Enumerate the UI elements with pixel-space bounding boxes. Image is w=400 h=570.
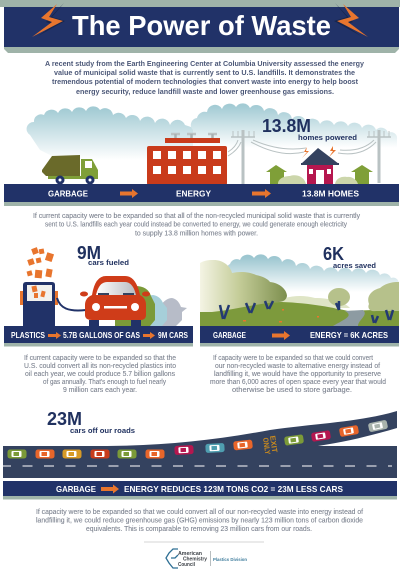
stat: 23M cars off our roads [47, 409, 135, 435]
intro text: value of municipal solid waste that is currently sent to U.S. landfills. It demonstrates the [54, 68, 355, 77]
divider [144, 542, 264, 543]
road with exit ramp [3, 411, 397, 478]
text: open space explanation: landfilling it, we would have the opportunity to preserve [214, 371, 381, 378]
intro text: energy security, reduce landfill waste and lower greenhouse gas emissions. [76, 87, 334, 96]
title text: The Power of Waste [72, 10, 331, 41]
logo: American Chemistry Council: Council [178, 562, 196, 568]
text: open space explanation: If capacity were to be expanded so that we could convert [213, 355, 373, 362]
exit only road marking: ONLY [261, 437, 272, 455]
label bar: garbage energy homes [4, 184, 399, 206]
panel: plastics to cars [4, 243, 193, 346]
road [333, 310, 365, 326]
text: homes explanation: to supply 13.8 million homes with power. [135, 230, 258, 238]
panel: open space saved [200, 244, 399, 346]
power poles and wires [228, 130, 391, 184]
logo: American Chemistry Council: American [178, 551, 202, 557]
label bar: garbage co2 cars: GARBAGE [56, 484, 96, 494]
text: plastics explanation: of gas annually. That's enough to fuel nearly [43, 379, 166, 386]
text: open space explanation: otherwise be used to store garbage. [232, 387, 352, 394]
stat: 6K acres saved: 6K [323, 244, 344, 264]
text: plastics explanation: If current capacity were to be expanded so that the [24, 355, 176, 362]
label bar: plastics gallons cars: 9M CARS [158, 330, 188, 340]
clouds [27, 103, 397, 160]
icon: powered house [301, 146, 339, 185]
title banner [0, 0, 400, 53]
stat: 13.8M homes powered [262, 116, 357, 142]
cars on the road [8, 420, 388, 458]
icon: fuel pump [20, 282, 86, 326]
text: cars explanation: landfilling it, we could reduce greenhouse gas (GHG) emissions by nearly 123 million tons of carbon dioxide [36, 518, 363, 524]
icon: power plant building [147, 134, 227, 185]
exit only road marking [261, 435, 279, 455]
label bar: plastics gallons cars: 5.7B GALLONS OF GAS [63, 330, 140, 340]
text: homes explanation: If current capacity were to be expanded so that all of the non-recycled municipal solid waste that is currently [33, 213, 360, 220]
label bar: garbage energy homes: ENERGY [176, 188, 211, 198]
stat: 6K acres saved: acres saved [333, 261, 376, 270]
stat: 13.8M homes powered: 13.8M [262, 116, 311, 136]
icon: row of pale trees [200, 260, 287, 319]
flowers [243, 309, 319, 322]
label bar: garbage energy homes: GARBAGE [48, 188, 88, 198]
text: homes explanation: sent to U.S. landfills each year could instead be converted to energy, we could generate enough electricity [45, 222, 347, 228]
ground [200, 302, 399, 326]
intro text: tremendous potential of modern technologies that convert waste into energy to help boost [52, 77, 359, 86]
intro text: A recent study from the Earth Engineering Center at Columbia University assessed the energy [45, 59, 364, 68]
exit only road marking: EXIT [268, 435, 279, 454]
label bar: plastics gallons cars: PLASTICS [11, 330, 45, 340]
text: plastics explanation: oil each year, we could produce 5.7 billion gallons [25, 371, 175, 378]
label bar: garbage energy acres: ENERGY = 6K ACRES [310, 330, 388, 340]
text: open space explanation [210, 355, 386, 394]
text: plastics explanation: U.S. could convert all its non-recycled plastics into [24, 363, 176, 370]
text: cars explanation: If capacity were to be expanded so that we could convert all of our non-recycled waste into energy instead of [36, 509, 363, 516]
stat: 9M cars fueled: 9M [77, 243, 101, 263]
stat: 9M cars fueled: cars fueled [88, 258, 129, 267]
distant pale hill [270, 296, 350, 308]
stat: 9M cars fueled [77, 243, 129, 267]
label bar: garbage energy homes: 13.8M HOMES [302, 188, 359, 198]
panel: cars off our roads [1, 409, 397, 500]
stat: 23M cars off our roads: 23M [47, 409, 82, 429]
text: open space explanation: more than 6,000 acres of open space every year that would [210, 379, 386, 386]
lane dashes [1, 465, 392, 467]
label bar: garbage co2 cars: ENERGY REDUCES 123M TONS CO2 = 23M LESS CARS [124, 484, 343, 494]
label bar: garbage co2 cars [3, 481, 397, 500]
icon: left lightning bolt [32, 3, 65, 37]
icon: garbage truck [42, 155, 98, 184]
text: cars explanation [36, 509, 363, 533]
panel: garbage to homes [4, 103, 399, 206]
text: plastics explanation: 9 million cars each year. [63, 387, 137, 394]
icon: green houses and bushes [266, 165, 373, 184]
label bar: garbage energy acres [200, 326, 399, 346]
text: plastics explanation [24, 355, 176, 394]
icon: red car [80, 276, 150, 327]
logo: American Chemistry Council: Plastics Division [213, 557, 247, 562]
icon: plastic pieces [27, 247, 54, 278]
logo: American Chemistry Council [166, 549, 247, 568]
label bar: plastics gallons cars [4, 326, 193, 346]
logo: American Chemistry Council: Chemistry [183, 556, 207, 562]
text: homes explanation [33, 213, 360, 238]
label bar: garbage energy acres: GARBAGE [213, 330, 246, 340]
sky and clouds [226, 254, 399, 310]
stat: 13.8M homes powered: homes powered [298, 133, 357, 142]
icon: background cars [115, 286, 187, 326]
intro text [45, 59, 364, 96]
text: cars explanation: equivalents. This is comparable to removing 23 million cars from our roads. [86, 526, 312, 533]
stat: 23M cars off our roads: cars off our roads [70, 426, 135, 435]
stat: 6K acres saved [323, 244, 376, 270]
icon: trees on the right [328, 282, 399, 323]
icon: right lightning bolt [334, 3, 368, 37]
text: open space explanation: our non-recycled waste to alternative energy instead of [215, 363, 380, 370]
